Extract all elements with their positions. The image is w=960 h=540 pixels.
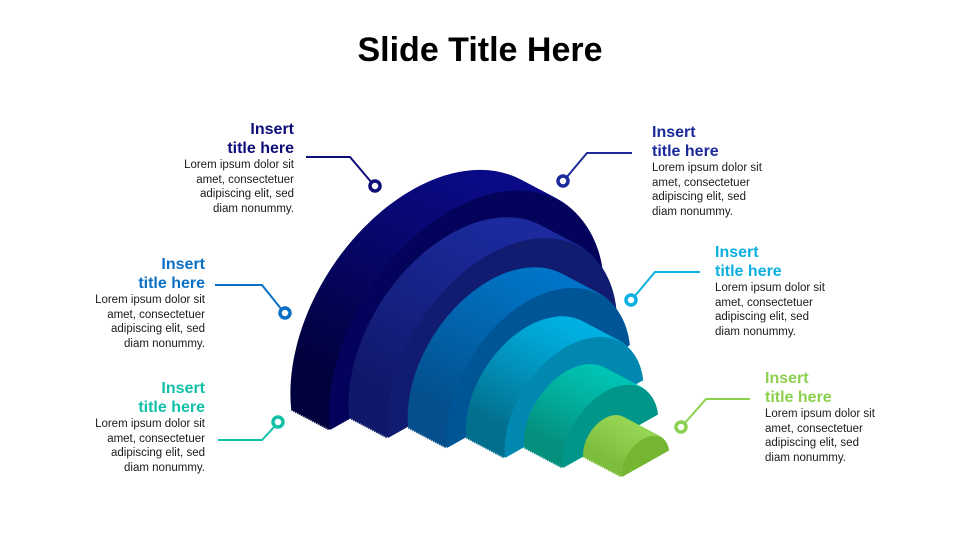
text block: mid-left: title here xyxy=(138,275,205,292)
text block: bottom-left: title here xyxy=(138,399,205,416)
text block: bottom-left: amet, consectetuer xyxy=(107,433,205,445)
text block: top-right: Insert xyxy=(652,124,696,141)
text block: mid-right: Lorem ipsum dolor sit xyxy=(715,282,825,294)
text block: top-left xyxy=(184,121,294,215)
text block: top-right: Lorem ipsum dolor sit xyxy=(652,162,762,174)
text block: top-left: Insert xyxy=(250,121,294,138)
text block: bottom-right: adipiscing elit, sed xyxy=(765,437,859,449)
text block: bottom-left: adipiscing elit, sed xyxy=(111,447,205,459)
text block: bottom-right: Insert xyxy=(765,370,809,387)
text block: top-right: diam nonummy. xyxy=(652,206,733,218)
text block: top-left: title here xyxy=(227,140,294,157)
text block: mid-right: amet, consectetuer xyxy=(715,297,813,309)
connector: mid-left xyxy=(215,285,290,318)
layer 3 (blue) xyxy=(399,229,630,448)
text block: top-right: adipiscing elit, sed xyxy=(652,191,746,203)
text block: mid-left: Insert xyxy=(161,256,205,273)
text block: mid-right: adipiscing elit, sed xyxy=(715,311,809,323)
text block: bottom-left: Lorem ipsum dolor sit xyxy=(95,418,205,430)
text block: bottom-right: diam nonummy. xyxy=(765,452,846,464)
text block: mid-left: diam nonummy. xyxy=(124,338,205,350)
connector: mid-right xyxy=(626,272,700,305)
text block: top-right xyxy=(652,124,762,218)
connector: top-left xyxy=(306,157,380,191)
text block: bottom-right: amet, consectetuer xyxy=(765,423,863,435)
layer 2 (royal blue) xyxy=(337,170,616,438)
text block: bottom-left: Insert xyxy=(161,380,205,397)
layer 4 (cyan) xyxy=(459,288,643,458)
text block: bottom-left: diam nonummy. xyxy=(124,462,205,474)
text block: mid-right xyxy=(715,244,825,338)
text block: bottom-right xyxy=(765,370,875,464)
text block: top-left: amet, consectetuer xyxy=(196,174,294,186)
text block: mid-left: amet, consectetuer xyxy=(107,309,205,321)
text block: mid-right: diam nonummy. xyxy=(715,326,796,338)
layer 5 (teal) xyxy=(520,345,658,468)
text block: mid-right: Insert xyxy=(715,244,759,261)
text block: bottom-right: Lorem ipsum dolor sit xyxy=(765,408,875,420)
text block: top-right: title here xyxy=(652,143,719,160)
text block: mid-left: Lorem ipsum dolor sit xyxy=(95,294,205,306)
text block: top-left: Lorem ipsum dolor sit xyxy=(184,159,294,171)
layer 1 (largest, navy) xyxy=(277,113,604,430)
title: Slide Title Here xyxy=(357,31,603,69)
connector: top-right xyxy=(558,153,632,186)
text block: mid-left: adipiscing elit, sed xyxy=(111,323,205,335)
connector: bottom-right xyxy=(676,399,750,432)
text block: mid-right: title here xyxy=(715,263,782,280)
text block: top-left: adipiscing elit, sed xyxy=(200,188,294,200)
text block: bottom-right: title here xyxy=(765,389,832,406)
connector: bottom-left xyxy=(218,417,283,440)
text block: top-right: amet, consectetuer xyxy=(652,177,750,189)
layer 6 (green, smallest) xyxy=(581,406,669,477)
text block: bottom-left xyxy=(95,380,205,474)
text block: mid-left xyxy=(95,256,205,350)
text block: top-left: diam nonummy. xyxy=(213,203,294,215)
